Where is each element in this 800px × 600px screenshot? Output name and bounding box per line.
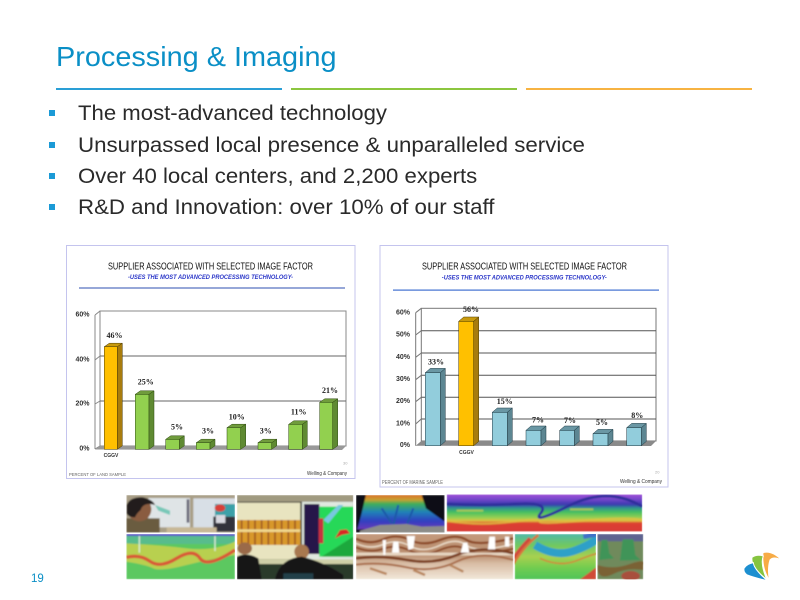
photo: analyst at workstation: [126, 495, 235, 533]
chart title: SUPPLIER ASSOCIATED WITH SELECTED IMAGE FACTOR: [108, 262, 313, 272]
logo: green sail: [752, 555, 767, 579]
y axis labels: 30%: [396, 376, 411, 383]
y axis labels: 60%: [396, 310, 411, 316]
header rule: [79, 288, 345, 289]
category label: CGGV: CGGV: [459, 450, 475, 456]
bullet 4 marker: [49, 204, 55, 210]
y axis labels: 0%: [79, 446, 90, 452]
chart panel: land sample: [66, 246, 355, 478]
bar value labels: 56%: [463, 305, 479, 314]
y axis labels: 20%: [396, 398, 411, 405]
y axis labels: 0%: [400, 442, 411, 449]
source credit: Welling & Company: [620, 479, 662, 485]
bar: 7% second: [560, 426, 579, 446]
bullet 2 text: Unsurpassed local presence & unparalleled service: [78, 133, 585, 157]
bar: 21%: [320, 399, 338, 449]
bar value labels: 3%: [260, 426, 272, 436]
y axis labels: 50%: [396, 332, 411, 338]
y axis labels: 40%: [396, 354, 411, 361]
bullet 1 text: The most-advanced technology: [78, 101, 387, 125]
source credit: Welling & Company: [307, 471, 347, 477]
title rule: orange: [526, 88, 752, 90]
bar value labels: 10%: [229, 412, 245, 422]
seismic section: green with red horizon: [126, 534, 235, 579]
bullet 4 text: R&D and Innovation: over 10% of our staff: [78, 195, 494, 219]
bar value labels: 15%: [497, 397, 513, 406]
3D seabed map: [356, 495, 445, 533]
bar: 3% second: [258, 439, 277, 449]
bar value labels: 5%: [596, 418, 608, 427]
image strip: processing photos and seismic sections: [126, 494, 644, 581]
bar: 11%: [289, 421, 307, 449]
bar value labels: 46%: [106, 331, 122, 340]
title rule: blue: [56, 88, 282, 90]
bar value labels: [106, 331, 338, 436]
bar value labels: 33%: [428, 358, 444, 366]
bar value labels: 11%: [291, 408, 306, 416]
slide number: 30: [343, 460, 348, 466]
bar value labels: [428, 305, 643, 427]
bar: 8%: [627, 423, 646, 446]
slide number: 20: [655, 470, 660, 474]
seismic section: brown salt structures: [356, 534, 513, 579]
bar: 3%: [196, 439, 215, 449]
chart panel: marine sample: [380, 246, 668, 487]
y axis labels: 20%: [75, 400, 90, 408]
bullet 1 marker: [49, 110, 55, 116]
bar: CGGV 46%: [104, 343, 122, 449]
title rule: green: [291, 88, 517, 90]
bar: 5%: [166, 436, 184, 449]
y axis labels: 10%: [396, 420, 411, 428]
y axis labels: [75, 312, 90, 452]
y axis labels: [396, 310, 411, 449]
seismic section: rainbow velocity bands: [447, 494, 642, 532]
chart subtitle: -USES THE MOST ADVANCED PROCESSING TECHNOLOGY-: [128, 274, 293, 281]
y axis labels: 40%: [75, 356, 90, 364]
y axis labels: 60%: [75, 312, 90, 318]
bar value labels: 3%: [202, 426, 214, 436]
chart subtitle: -USES THE MOST ADVANCED PROCESSING TECHNOLOGY-: [442, 274, 607, 282]
plot frame and gridlines: [416, 308, 656, 446]
bar: 33%: [425, 368, 445, 446]
header rule: [393, 290, 659, 291]
bar: 15%: [492, 408, 512, 446]
bar value labels: 25%: [138, 378, 154, 386]
bar value labels: 8%: [631, 411, 643, 420]
title: Processing & Imaging: [56, 41, 337, 72]
seismic section: folded green layers: [513, 534, 598, 579]
bar: 7%: [526, 426, 546, 446]
bar: 5%: [593, 429, 613, 446]
bar: CGGV 56%: [459, 317, 479, 446]
bullet 2 marker: [49, 142, 55, 148]
logo: [744, 552, 782, 581]
bar value labels: 5%: [171, 422, 183, 432]
bar: 25%: [135, 391, 154, 449]
bar value labels: 21%: [322, 386, 338, 395]
bullet list: [49, 101, 585, 219]
seismic section: muted contour map: [597, 534, 644, 581]
bar: 10%: [227, 424, 246, 449]
bullet 3 marker: [49, 173, 55, 179]
photo: team viewing large display wall: [237, 495, 353, 579]
sample footnote: PERCENT OF MARINE SAMPLE: [382, 480, 444, 486]
bar value labels: 7%: [532, 416, 544, 424]
logo: blue sail: [744, 563, 767, 581]
bullet 3 text: Over 40 local centers, and 2,200 experts: [78, 164, 477, 188]
chart title: SUPPLIER ASSOCIATED WITH SELECTED IMAGE FACTOR: [422, 262, 627, 272]
sample footnote: PERCENT OF LAND SAMPLE: [69, 472, 127, 478]
plot frame and gridlines: [95, 311, 346, 450]
category label: CGGV: CGGV: [104, 453, 119, 459]
logo: orange sail: [763, 552, 782, 580]
bar value labels: 7%: [564, 416, 576, 425]
page number: 19: [31, 573, 44, 585]
